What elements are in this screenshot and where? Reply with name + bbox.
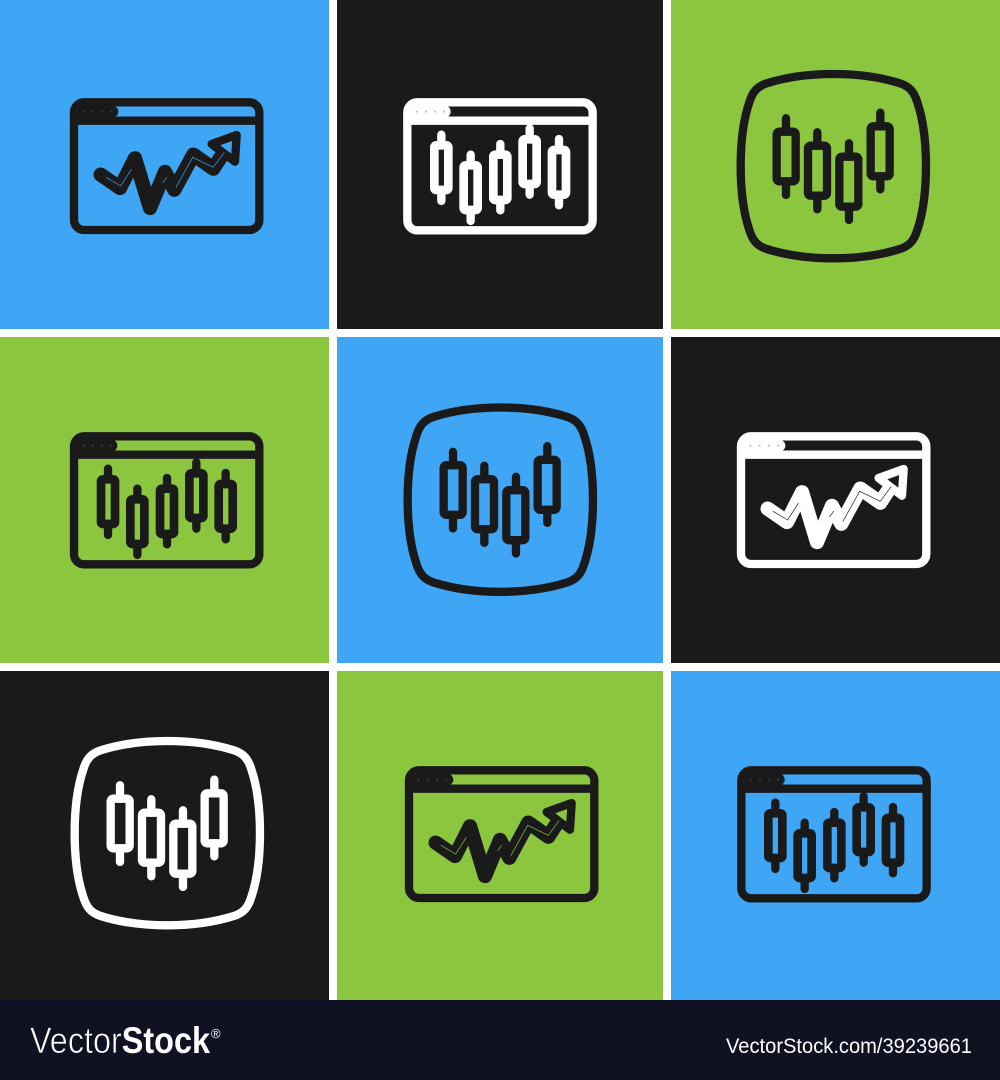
- image id url: VectorStock.com/39239661: [726, 1035, 972, 1058]
- icon: browser window with rising line chart: [741, 436, 926, 564]
- icon: squircle with candlesticks: [741, 74, 926, 258]
- panel: blue line chart window: [0, 0, 329, 329]
- icon: squircle with candlesticks: [75, 741, 260, 925]
- panel: black line chart window: [671, 337, 1000, 663]
- panel: black candlestick squircle: [0, 671, 329, 1000]
- logo: VectorStock wordmark: VectorStock: [30, 1020, 210, 1061]
- icon: squircle with candlesticks: [408, 407, 593, 592]
- panel: blue candlestick window: [671, 671, 1000, 1000]
- panel: green candlestick squircle: [671, 0, 1000, 329]
- panel: blue candlestick squircle: [337, 337, 663, 663]
- panel: green candlestick window: [0, 337, 329, 663]
- icon: browser window with rising line chart: [74, 102, 259, 230]
- footer bar: [0, 1000, 1000, 1080]
- panel: green line chart window: [337, 671, 663, 1000]
- icon: browser window with rising line chart: [409, 770, 594, 898]
- icon: browser window with candlesticks: [741, 770, 927, 898]
- icon: browser window with candlesticks: [74, 436, 259, 564]
- registered mark: ®: [211, 1026, 221, 1041]
- panel: black candlestick window: [337, 0, 663, 329]
- icon: browser window with candlesticks: [407, 102, 593, 230]
